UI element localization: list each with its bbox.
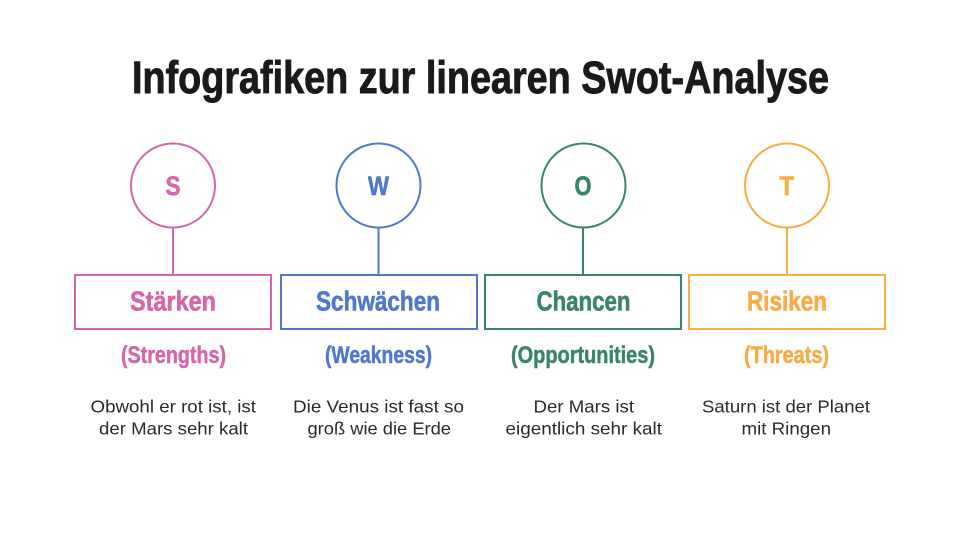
title: Infografiken zur linearen Swot-Analyse (132, 52, 829, 103)
text block: Strengths description: Obwohl er rot ist, ist (90, 396, 256, 416)
panel: Weakness (281, 144, 477, 438)
heading box: Stärken (75, 275, 271, 329)
icon: circle with letter W (336, 144, 420, 228)
subheading: Weakness: (Weakness) (325, 342, 432, 369)
text block: Threats description: mit Ringen (742, 418, 831, 438)
icon: circle with letter W: W (368, 171, 389, 201)
icon: circle with letter T (745, 144, 829, 228)
text block: Opportunities description: Der Mars ist (534, 396, 634, 416)
heading box: Stärken: Stärken (130, 286, 216, 316)
panel: Threats (689, 144, 885, 438)
text block: Weakness description: groß wie die Erde (308, 418, 451, 438)
connector: T (786, 228, 788, 275)
heading box: Risiken: Risiken (747, 286, 827, 316)
subheading: Opportunities: (Opportunities) (511, 342, 655, 369)
text block: Threats description (702, 396, 870, 438)
text block: Weakness description (293, 396, 464, 438)
icon: circle with letter S (131, 144, 215, 228)
heading box: Chancen (485, 275, 681, 329)
icon: circle with letter S: S (166, 171, 180, 201)
subheading: Threats: (Threats) (744, 342, 829, 369)
heading box: Risiken (689, 275, 885, 329)
text block: Opportunities description (506, 396, 662, 438)
text block: Threats description: Saturn ist der Planet (702, 396, 870, 416)
icon: circle with letter O (542, 144, 626, 228)
heading box: Chancen: Chancen (536, 286, 630, 316)
icon: circle with letter T: T (780, 171, 794, 201)
panel: Strengths (75, 144, 271, 438)
icon: circle with letter O: O (574, 171, 592, 201)
connector: W (378, 228, 380, 275)
heading box: Schwächen: Schwächen (316, 286, 440, 316)
connector: O (582, 228, 584, 275)
connector: S (172, 228, 174, 275)
text block: Weakness description: Die Venus ist fast so (293, 396, 464, 416)
text block: Strengths description (90, 396, 256, 438)
text block: Strengths description: der Mars sehr kalt (99, 418, 248, 438)
panel: Opportunities (485, 144, 681, 438)
subheading: Strengths: (Strengths) (121, 342, 226, 369)
text block: Opportunities description: eigentlich sehr kalt (506, 418, 662, 438)
heading box: Schwächen (281, 275, 477, 329)
